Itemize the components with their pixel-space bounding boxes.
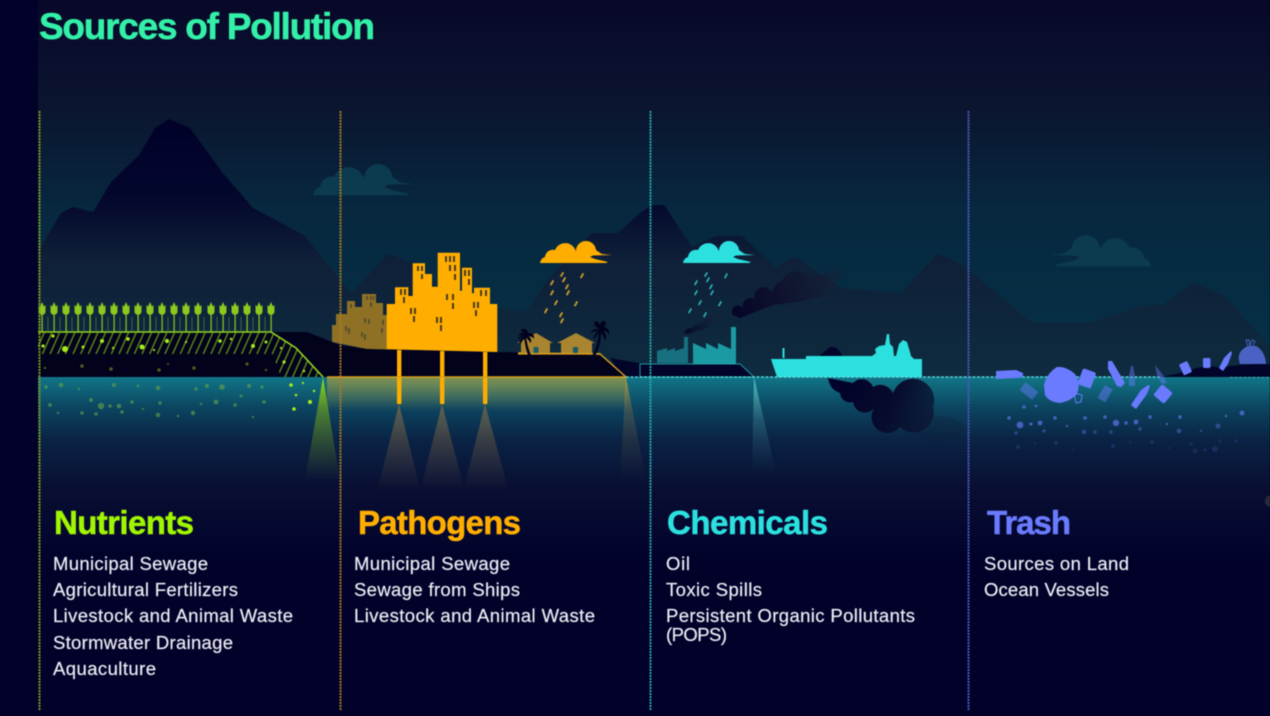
heading: chemicals: Chemicals	[667, 504, 828, 541]
list: chemicals: Toxic Spills	[666, 579, 762, 600]
list: pathogens	[354, 553, 595, 626]
underwater oil plume	[828, 378, 964, 440]
land tail	[610, 358, 652, 377]
cyan rain	[689, 273, 727, 316]
list: trash	[984, 553, 1129, 600]
tanker ship	[771, 334, 922, 377]
chemical plume	[752, 377, 776, 472]
palm trees	[518, 321, 609, 356]
shoreline	[327, 353, 626, 377]
column: nutrients	[53, 504, 293, 679]
list: nutrients: Agricultural Fertilizers	[53, 579, 238, 600]
background cloud right	[1049, 235, 1151, 266]
trash particles	[1007, 405, 1244, 428]
faded debris	[1020, 365, 1167, 402]
floating debris	[996, 351, 1232, 409]
factory large	[693, 327, 736, 364]
cyan cloud	[683, 241, 755, 263]
list: pathogens: Municipal Sewage	[354, 553, 510, 574]
list: nutrients: Aquaculture	[53, 658, 156, 679]
farm field	[38, 332, 323, 377]
heading: nutrients: Nutrients	[54, 504, 194, 541]
ship smoke	[732, 266, 846, 318]
factory small	[657, 337, 688, 363]
list: nutrients: Stormwater Drainage	[53, 632, 233, 653]
runoff plume	[305, 377, 340, 480]
coastal runoff plume	[620, 377, 646, 480]
column: pathogens	[354, 504, 595, 626]
plastic ring	[1074, 393, 1082, 403]
section divider lines	[40, 111, 968, 710]
list: trash: Ocean Vessels	[984, 579, 1109, 600]
heading: trash: Trash	[987, 504, 1071, 541]
factory smoke	[684, 312, 726, 334]
trash bag	[1239, 340, 1266, 364]
trash land	[1159, 364, 1270, 377]
background city	[332, 294, 387, 350]
list: nutrients	[53, 553, 293, 679]
sea	[38, 377, 1270, 567]
list: nutrients: Livestock and Animal Waste	[53, 605, 293, 626]
list: chemicals: Persistent Organic Pollutants	[666, 605, 915, 626]
horizon line	[626, 376, 1270, 378]
heading: pathogens: Pathogens	[358, 504, 521, 541]
category: pathogens scene	[327, 241, 646, 488]
category: nutrients scene	[38, 302, 340, 480]
edge marker	[1265, 495, 1270, 507]
amber rain	[545, 273, 583, 322]
column: trash	[984, 504, 1129, 600]
nutrient particles in water	[44, 383, 266, 418]
wheat crop	[38, 302, 274, 332]
background cloud left	[313, 164, 415, 195]
nutrient particles on land	[41, 334, 305, 372]
title: Sources of Pollution	[39, 6, 375, 47]
city	[387, 253, 497, 352]
list: chemicals: (POPS)	[666, 624, 727, 645]
list: nutrients: Municipal Sewage	[53, 553, 208, 574]
list: chemicals	[666, 553, 915, 645]
list: chemicals: Oil	[666, 553, 690, 574]
sewage pipes	[397, 350, 487, 404]
amber cloud	[540, 241, 612, 263]
list: trash: Sources on Land	[984, 553, 1129, 574]
houses	[517, 333, 600, 355]
hill land	[271, 332, 626, 377]
factory land	[640, 364, 754, 377]
list: pathogens: Sewage from Ships	[354, 579, 520, 600]
category: trash scene	[996, 340, 1270, 453]
list: pathogens: Livestock and Animal Waste	[354, 605, 595, 626]
category: chemicals scene	[640, 241, 964, 472]
sewage plumes	[378, 404, 508, 488]
column: chemicals	[666, 504, 915, 645]
background mountains	[38, 119, 1270, 378]
